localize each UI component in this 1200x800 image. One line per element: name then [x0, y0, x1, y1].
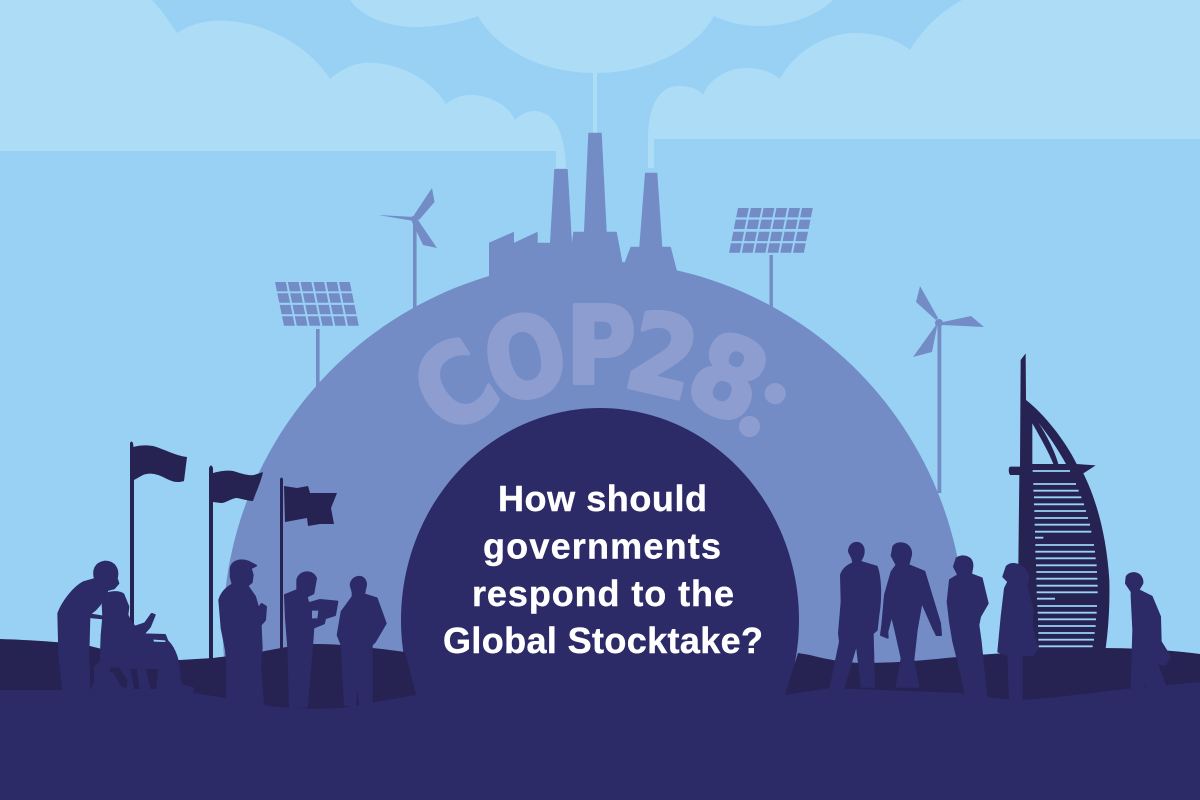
central dark circle: [401, 408, 799, 700]
flags: [130, 442, 337, 670]
tower window lines: [1033, 471, 1098, 646]
person: woman: [998, 564, 1037, 702]
solar panel: left: [276, 287, 358, 387]
person: man with hand on hip: [338, 577, 386, 705]
person: man in profile: [948, 556, 988, 700]
flag 3: [280, 478, 337, 660]
wind turbine: right: [913, 286, 984, 493]
cloud: left: [0, 0, 566, 168]
solar panel: right: [730, 213, 812, 309]
hill: left: [0, 639, 416, 710]
headline question: governments: [483, 526, 721, 566]
headline question: [443, 478, 763, 661]
person: man walking: [881, 543, 941, 687]
person: man with book: [285, 572, 337, 708]
Burj Al Arab tower: [1009, 353, 1109, 653]
person: man in cap: [219, 560, 266, 708]
cloud: centre: [350, 0, 833, 73]
dome lettering COP28:: C: [391, 315, 520, 460]
person: man with bag: [1126, 573, 1170, 688]
smoke stream: centre chimney: [593, 70, 597, 134]
cloud: right: [648, 0, 1200, 168]
dome lettering COP28:: P: [566, 284, 636, 408]
people: three men near dome: [830, 543, 988, 700]
dome and factory: [223, 133, 984, 700]
people: right group: [998, 564, 1170, 702]
headline question: How should: [498, 478, 707, 519]
dome lettering COP28:: [391, 284, 832, 470]
headline question: respond to the: [472, 573, 734, 614]
people: carer and wheelchair user: [58, 562, 193, 694]
person: wheelchair user: [90, 592, 193, 694]
dome lettering COP28:: 2: [616, 288, 709, 426]
dome lettering COP28:: O: [472, 288, 579, 430]
person: carer leaning over: [58, 562, 118, 692]
wind turbine: left: [378, 188, 437, 311]
foreground ground: [0, 682, 1200, 800]
clouds: [0, 0, 1200, 168]
dome: [223, 261, 965, 700]
hill: right: [785, 648, 1200, 710]
headline question: Global Stocktake?: [443, 620, 763, 661]
person: man standing: [830, 543, 880, 690]
hills: [0, 639, 1200, 710]
dome lettering COP28:: 8: [670, 306, 786, 450]
factory skyline: [489, 133, 678, 290]
dome lettering COP28:: :: [710, 330, 832, 470]
people: three men near flags: [219, 560, 386, 708]
flag 2: [209, 466, 263, 670]
flag 1: [130, 442, 187, 640]
